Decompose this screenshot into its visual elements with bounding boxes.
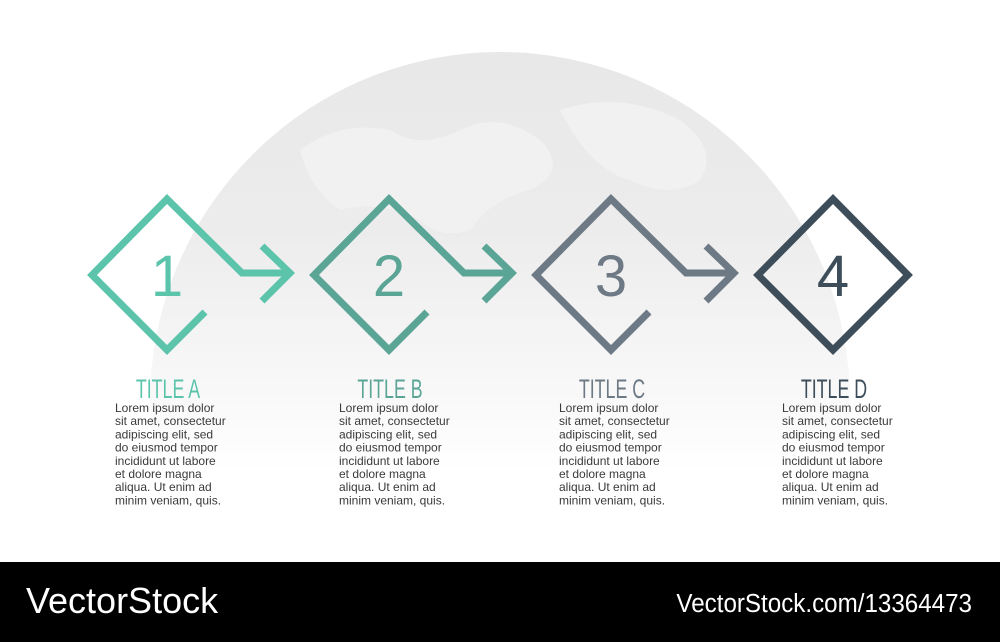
step A text: et dolore magna <box>115 467 202 481</box>
step A text: sit amet, consectetur <box>115 414 226 428</box>
step C text: aliqua. Ut enim ad <box>559 480 656 494</box>
step A text: do eiusmod tempor <box>115 441 218 455</box>
step B text: adipiscing elit, sed <box>339 427 437 441</box>
step A text: adipiscing elit, sed <box>115 427 213 441</box>
step C text: do eiusmod tempor <box>559 441 662 455</box>
step 4 icon: 4 <box>817 244 849 309</box>
step C text: et dolore magna <box>559 467 646 481</box>
step D text: aliqua. Ut enim ad <box>782 480 879 494</box>
step D text <box>782 373 893 507</box>
globe background <box>150 52 850 642</box>
step B text: sit amet, consectetur <box>339 414 450 428</box>
step B text: TITLE B <box>357 373 423 404</box>
step D text: Lorem ipsum dolor <box>782 401 881 415</box>
footer bar <box>0 562 1000 642</box>
step 1 icon: 1 <box>151 244 183 309</box>
step C text: TITLE C <box>579 373 645 404</box>
step C text: incididunt ut labore <box>559 454 660 468</box>
step 4 icon <box>758 199 908 350</box>
footer bar: VectorStock.com/13364473 <box>676 589 972 618</box>
step A text: TITLE A <box>136 373 201 404</box>
step 3 icon: 3 <box>595 244 627 309</box>
step B text: incididunt ut labore <box>339 454 440 468</box>
step A text: minim veniam, quis. <box>115 493 221 507</box>
step D text: minim veniam, quis. <box>782 493 888 507</box>
step 1 icon <box>92 199 290 350</box>
step D text: incididunt ut labore <box>782 454 883 468</box>
step D text: et dolore magna <box>782 467 869 481</box>
step C text: Lorem ipsum dolor <box>559 401 658 415</box>
step C text <box>559 373 670 507</box>
step 2 icon <box>314 199 512 350</box>
step A text: Lorem ipsum dolor <box>115 401 214 415</box>
step D text: sit amet, consectetur <box>782 414 893 428</box>
step 3 icon <box>536 199 734 350</box>
step A text: incididunt ut labore <box>115 454 216 468</box>
step D text: TITLE D <box>801 373 867 404</box>
step C text: minim veniam, quis. <box>559 493 665 507</box>
step 2 icon: 2 <box>373 244 405 309</box>
step B text <box>339 373 450 507</box>
step B text: do eiusmod tempor <box>339 441 442 455</box>
step B text: aliqua. Ut enim ad <box>339 480 436 494</box>
step B text: et dolore magna <box>339 467 426 481</box>
step C text: sit amet, consectetur <box>559 414 670 428</box>
step A text <box>115 373 226 507</box>
step B text: minim veniam, quis. <box>339 493 445 507</box>
step D text: do eiusmod tempor <box>782 441 885 455</box>
step C text: adipiscing elit, sed <box>559 427 657 441</box>
footer bar: VectorStock <box>26 580 219 621</box>
step D text: adipiscing elit, sed <box>782 427 880 441</box>
step A text: aliqua. Ut enim ad <box>115 480 212 494</box>
step B text: Lorem ipsum dolor <box>339 401 438 415</box>
